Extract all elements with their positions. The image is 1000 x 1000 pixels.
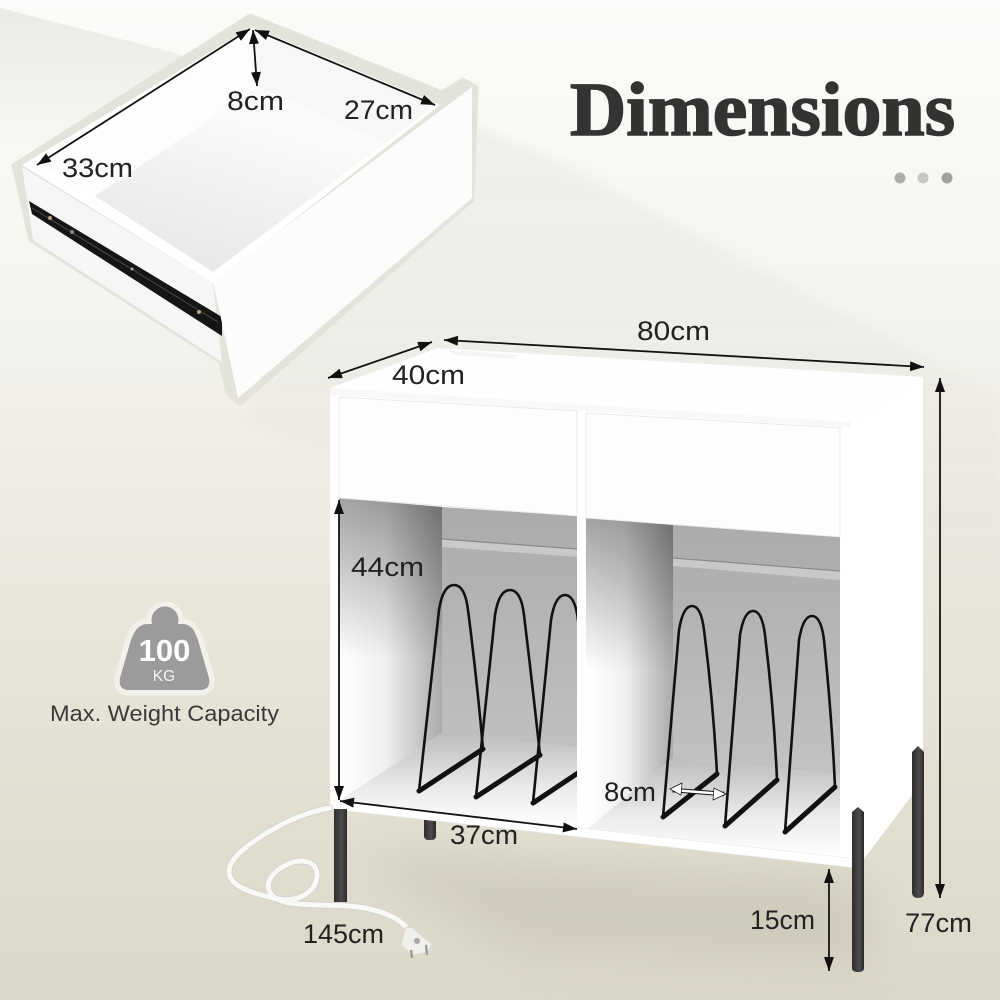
arrow: drawer 27cm [255, 30, 435, 105]
centre divider [577, 411, 586, 831]
drawer side wall [38, 29, 258, 196]
arrow: drawer 33cm [37, 29, 250, 165]
drawer halo [13, 15, 477, 405]
drawer slide rail [29, 201, 222, 336]
cabinet side panel [840, 377, 923, 868]
label: 37cm: 37cm [450, 820, 518, 850]
drawer back wall [253, 29, 436, 143]
drawer illustration [13, 15, 477, 405]
arrow: drawer depth 8cm [253, 30, 257, 86]
label: 44cm: 44cm [351, 552, 424, 582]
legs [334, 746, 924, 972]
arrow: inner height 44cm [338, 500, 340, 800]
label: 15cm: 15cm [750, 905, 815, 935]
drawer front right [586, 413, 840, 537]
arrow: leg 15cm [828, 869, 830, 971]
arrow: inner width 37cm [340, 801, 577, 829]
socket strip [448, 350, 518, 359]
drawer rim [22, 27, 440, 283]
label: 80cm: 80cm [637, 316, 710, 346]
label: 8cm divider: 8cm [604, 777, 656, 807]
drawer left outer side [22, 167, 222, 362]
record dividers: left compartment [419, 585, 590, 803]
decorative dots [894, 172, 952, 184]
arrow: cabinet 80cm [444, 340, 924, 367]
icon: weight: KG [153, 668, 175, 685]
record dividers: right compartment [663, 606, 835, 832]
label: 33cm: 33cm [62, 153, 133, 183]
cabinet [330, 348, 923, 868]
label: 145cm: 145cm [303, 919, 384, 949]
label: 40cm: 40cm [392, 360, 465, 390]
bottom rail [330, 800, 857, 868]
arrow: cabinet 40cm [328, 342, 432, 378]
back left leg [424, 815, 436, 840]
drawer front panel [213, 87, 472, 398]
icon: weight [120, 602, 209, 690]
drawer front left [339, 397, 577, 516]
label: 27cm: 27cm [344, 95, 413, 125]
arrow: height 77cm [939, 378, 941, 898]
power cord [229, 808, 407, 928]
weight capacity badge [50, 602, 279, 726]
icon: weight: 100 [139, 633, 190, 668]
cabinet top [330, 348, 923, 422]
arrow: divider gap 8cm [670, 783, 726, 800]
plug [401, 927, 432, 958]
right compartment [586, 518, 840, 858]
weight caption: Max. Weight Capacity [50, 701, 279, 726]
label: 8cm drawer: 8cm [227, 86, 284, 116]
left compartment [339, 498, 577, 829]
title: Dimensions [570, 68, 955, 152]
cabinet front frame [330, 388, 857, 868]
label: 77cm: 77cm [905, 908, 972, 938]
top front rim [330, 388, 850, 428]
drawer floor [95, 87, 385, 272]
